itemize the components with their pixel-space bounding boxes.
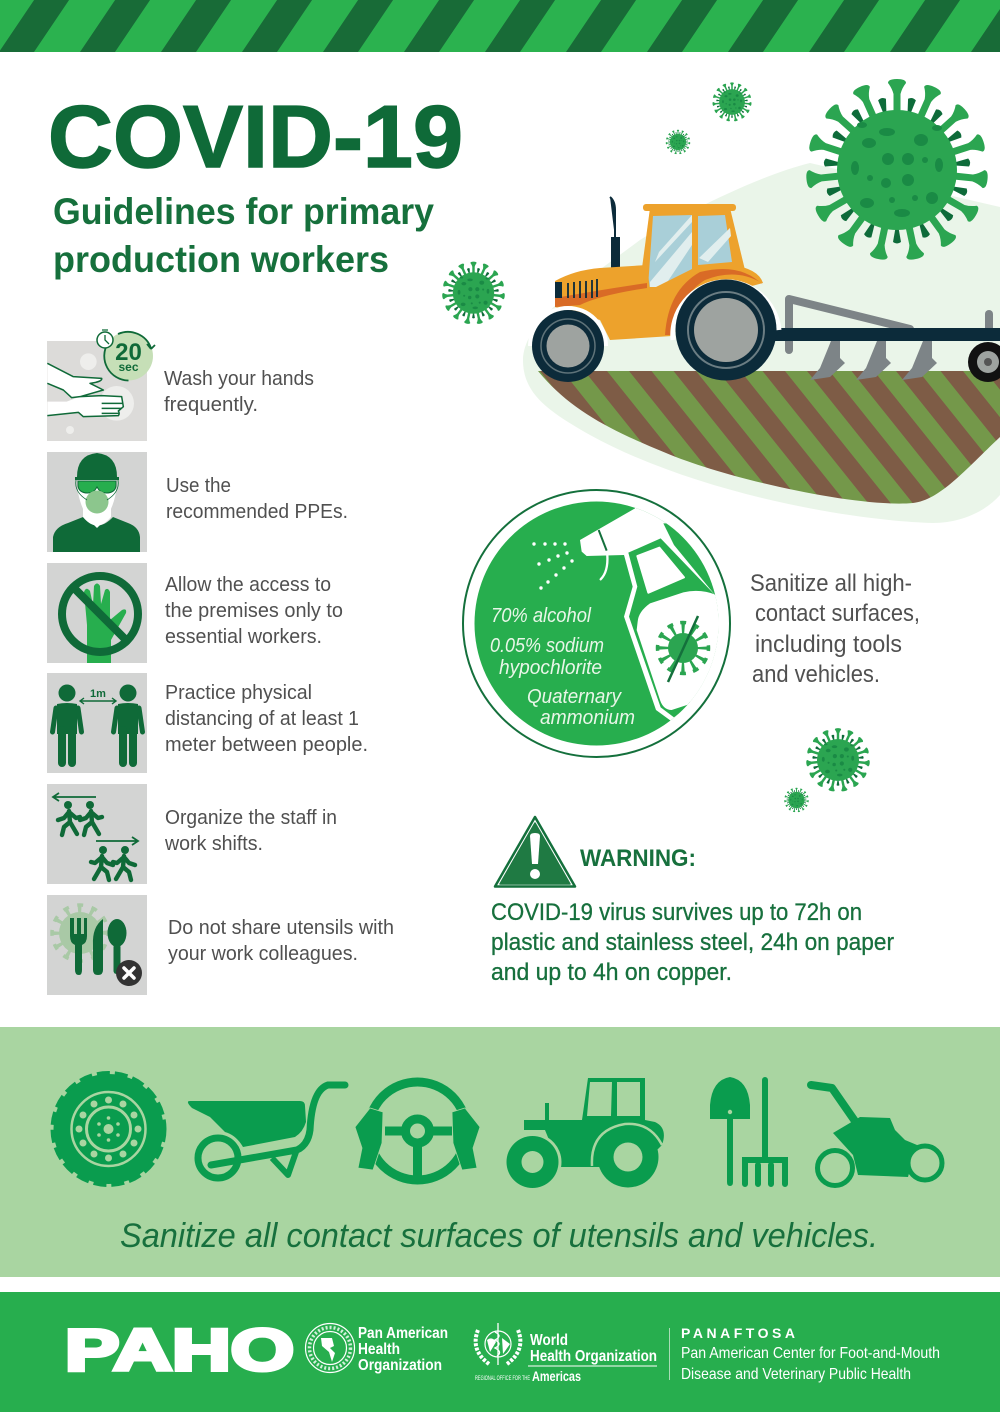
icon: physical distance 1m: 1m bbox=[90, 688, 106, 700]
PAHO name: Pan American bbox=[358, 1325, 448, 1342]
icon: crossed-out virus bbox=[658, 616, 708, 682]
text: physical distance: distancing of at least 1 bbox=[165, 708, 359, 730]
front wheel bbox=[530, 308, 606, 382]
WHO name: Health Organization bbox=[530, 1348, 657, 1365]
icon: shovel and fork bbox=[710, 1077, 785, 1186]
small virus top bbox=[712, 82, 752, 122]
text: wash hands: Wash your hands bbox=[164, 368, 314, 390]
subtitle bbox=[53, 191, 434, 280]
title: COVID-19 bbox=[48, 87, 463, 186]
WHO emblem bbox=[476, 1323, 520, 1365]
PAHO name bbox=[358, 1325, 448, 1374]
text: wash hands bbox=[164, 368, 314, 416]
warning text: plastic and stainless steel, 24h on paper bbox=[491, 929, 894, 956]
text: utensils: Do not share utensils with bbox=[168, 917, 394, 939]
disinfectant list bbox=[490, 605, 635, 729]
text: work shifts: work shifts. bbox=[164, 833, 263, 855]
text: physical distance: Practice physical bbox=[165, 682, 312, 704]
rear wheel bbox=[673, 280, 779, 380]
warning text: and up to 4h on copper. bbox=[491, 959, 732, 986]
PAHO emblem bbox=[306, 1324, 354, 1372]
text: sanitize surfaces: contact surfaces, bbox=[755, 600, 920, 627]
pale background blob bbox=[523, 163, 1000, 523]
exhaust pipe bbox=[610, 197, 619, 267]
small virus bbox=[442, 262, 505, 324]
text: physical distance bbox=[165, 682, 368, 756]
text: work shifts: Organize the staff in bbox=[165, 807, 337, 829]
icon: tractor bbox=[504, 1078, 664, 1190]
text: sanitize surfaces: and vehicles. bbox=[752, 661, 880, 688]
text: work shifts bbox=[164, 807, 337, 855]
icon: work shifts bbox=[47, 784, 147, 884]
top stripe banner bbox=[0, 0, 1000, 52]
footer bbox=[0, 1292, 1000, 1412]
PAHO name: Organization bbox=[358, 1357, 442, 1374]
icon: do not share utensils bbox=[47, 895, 147, 995]
slogan: Sanitize all contact surfaces of utensils and vehicles. bbox=[120, 1217, 878, 1255]
PANAFTOSA name bbox=[681, 1325, 940, 1383]
icon: physical distance 1m bbox=[47, 673, 147, 773]
large virus bbox=[806, 79, 988, 261]
text: PPE bbox=[166, 475, 348, 523]
warning triangle icon bbox=[495, 817, 575, 886]
PANAFTOSA name: Pan American Center for Foot-and-Mouth bbox=[681, 1345, 940, 1362]
warning heading: WARNING: bbox=[580, 845, 696, 872]
icon: PPE worker bbox=[47, 452, 147, 552]
text: sanitize surfaces bbox=[750, 570, 920, 688]
subtitle: Guidelines for primary bbox=[53, 191, 434, 232]
disinfectant list: 70% alcohol bbox=[491, 605, 592, 627]
text: essential workers bbox=[165, 574, 343, 648]
icon: wheelbarrow bbox=[188, 1085, 345, 1178]
WHO name: REGIONAL OFFICE FOR THE bbox=[475, 1376, 530, 1382]
text: essential workers: Allow the access to bbox=[165, 574, 331, 596]
icon: steering wheel with hands bbox=[355, 1082, 480, 1180]
panel: contact surfaces band bbox=[0, 1027, 1000, 1277]
illustration: tractor on field bbox=[523, 163, 1000, 523]
WHO name bbox=[475, 1332, 657, 1384]
icon: wash hands 20 sec bbox=[47, 330, 155, 441]
text: PPE: Use the bbox=[166, 475, 231, 497]
text: wash hands: frequently. bbox=[164, 394, 258, 416]
icon: lawn mower bbox=[811, 1085, 942, 1188]
WHO name: World bbox=[530, 1332, 568, 1349]
icon: no entry hand bbox=[47, 563, 147, 663]
text: sanitize surfaces: Sanitize all high- bbox=[750, 570, 912, 597]
striped field bbox=[530, 371, 1000, 511]
disinfectant list: hypochlorite bbox=[499, 657, 602, 679]
tiny virus middle bbox=[784, 788, 809, 812]
small virus middle bbox=[806, 728, 870, 792]
warning text bbox=[491, 899, 894, 986]
text: sanitize surfaces: including tools bbox=[755, 631, 902, 658]
text: essential workers: the premises only to bbox=[165, 600, 343, 622]
warning text: COVID-19 virus survives up to 72h on bbox=[491, 899, 862, 926]
text: essential workers: essential workers. bbox=[165, 626, 322, 648]
text: PPE: recommended PPEs. bbox=[166, 501, 348, 523]
disinfectant list: 0.05% sodium bbox=[490, 635, 604, 657]
PANAFTOSA name: PANAFTOSA bbox=[681, 1325, 795, 1341]
PAHO logo: PAHO bbox=[65, 1318, 294, 1383]
icon: wash hands 20 sec: 20 bbox=[115, 339, 142, 366]
viruses bbox=[442, 79, 988, 812]
plough bbox=[772, 299, 1000, 382]
sanitizer spray bottle circle bbox=[463, 480, 750, 757]
disinfectant list: Quaternary bbox=[527, 686, 622, 708]
tractor body bbox=[555, 265, 763, 340]
rear fender bbox=[665, 269, 763, 335]
PANAFTOSA name: Disease and Veterinary Public Health bbox=[681, 1366, 911, 1383]
tiny virus top bbox=[666, 130, 690, 154]
cab bbox=[642, 204, 745, 300]
PAHO name: Health bbox=[358, 1341, 400, 1358]
text: physical distance: meter between people. bbox=[165, 734, 368, 756]
icon: wash hands 20 sec: sec bbox=[118, 360, 139, 374]
subtitle: production workers bbox=[53, 239, 389, 280]
disinfectant list: ammonium bbox=[540, 707, 635, 729]
WHO name: Americas bbox=[532, 1368, 581, 1384]
text: utensils bbox=[168, 917, 394, 965]
icon: tyre bbox=[52, 1073, 164, 1185]
text: utensils: your work colleagues. bbox=[168, 943, 358, 965]
